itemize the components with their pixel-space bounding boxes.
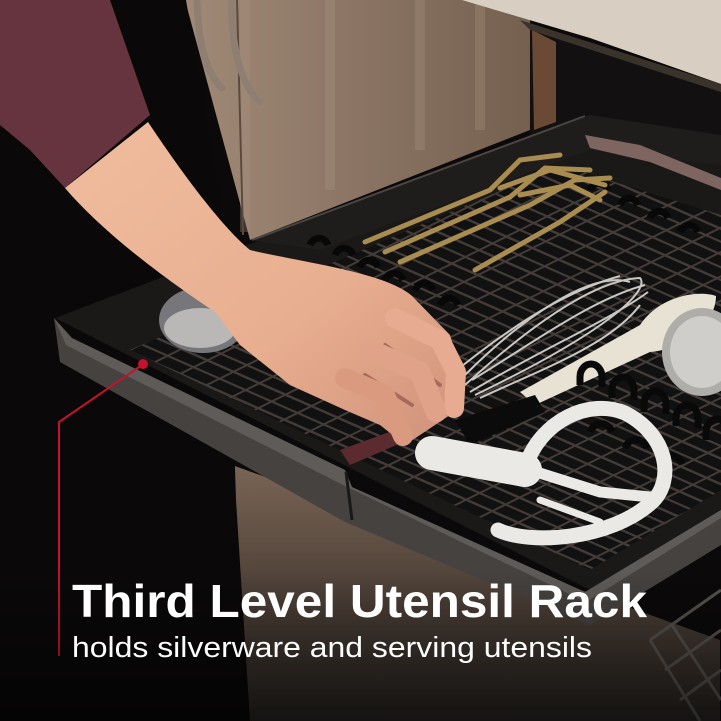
upper rack tines <box>310 183 698 305</box>
strainer bowl <box>159 287 247 353</box>
caption backdrop <box>0 570 721 721</box>
lower rack right <box>650 590 721 721</box>
finger: ring <box>345 378 403 436</box>
tray front wall <box>54 318 721 625</box>
white spatula <box>520 294 716 405</box>
subtitle: holds silverware and serving utensils <box>72 632 592 664</box>
lower right tines <box>580 364 721 464</box>
red leader line with dot <box>59 359 148 656</box>
sleeve <box>0 0 150 188</box>
finger shadows <box>365 345 440 405</box>
red utensil handle <box>340 428 408 465</box>
dishwasher interior <box>530 30 721 240</box>
mesh strainer <box>662 308 721 396</box>
wire rack grid <box>130 165 721 570</box>
gold forks <box>365 155 610 270</box>
person dark trousers <box>0 122 250 721</box>
whisk <box>462 276 648 398</box>
tray rear wall <box>250 115 721 250</box>
black paddle collar <box>455 395 545 445</box>
rear rim highlight <box>252 116 585 240</box>
hand and forearm <box>65 122 462 445</box>
dishwasher door edge <box>532 30 556 130</box>
rack tray interior <box>55 115 721 590</box>
pan handle <box>585 135 721 190</box>
finger: index <box>395 318 456 408</box>
white mixer paddle <box>432 408 665 538</box>
lower cabinet and floor <box>232 465 720 721</box>
marble countertop <box>462 0 721 92</box>
cabinet handles <box>197 0 260 102</box>
title: Third Level Utensil Rack <box>72 575 647 627</box>
finger: middle <box>370 350 436 412</box>
